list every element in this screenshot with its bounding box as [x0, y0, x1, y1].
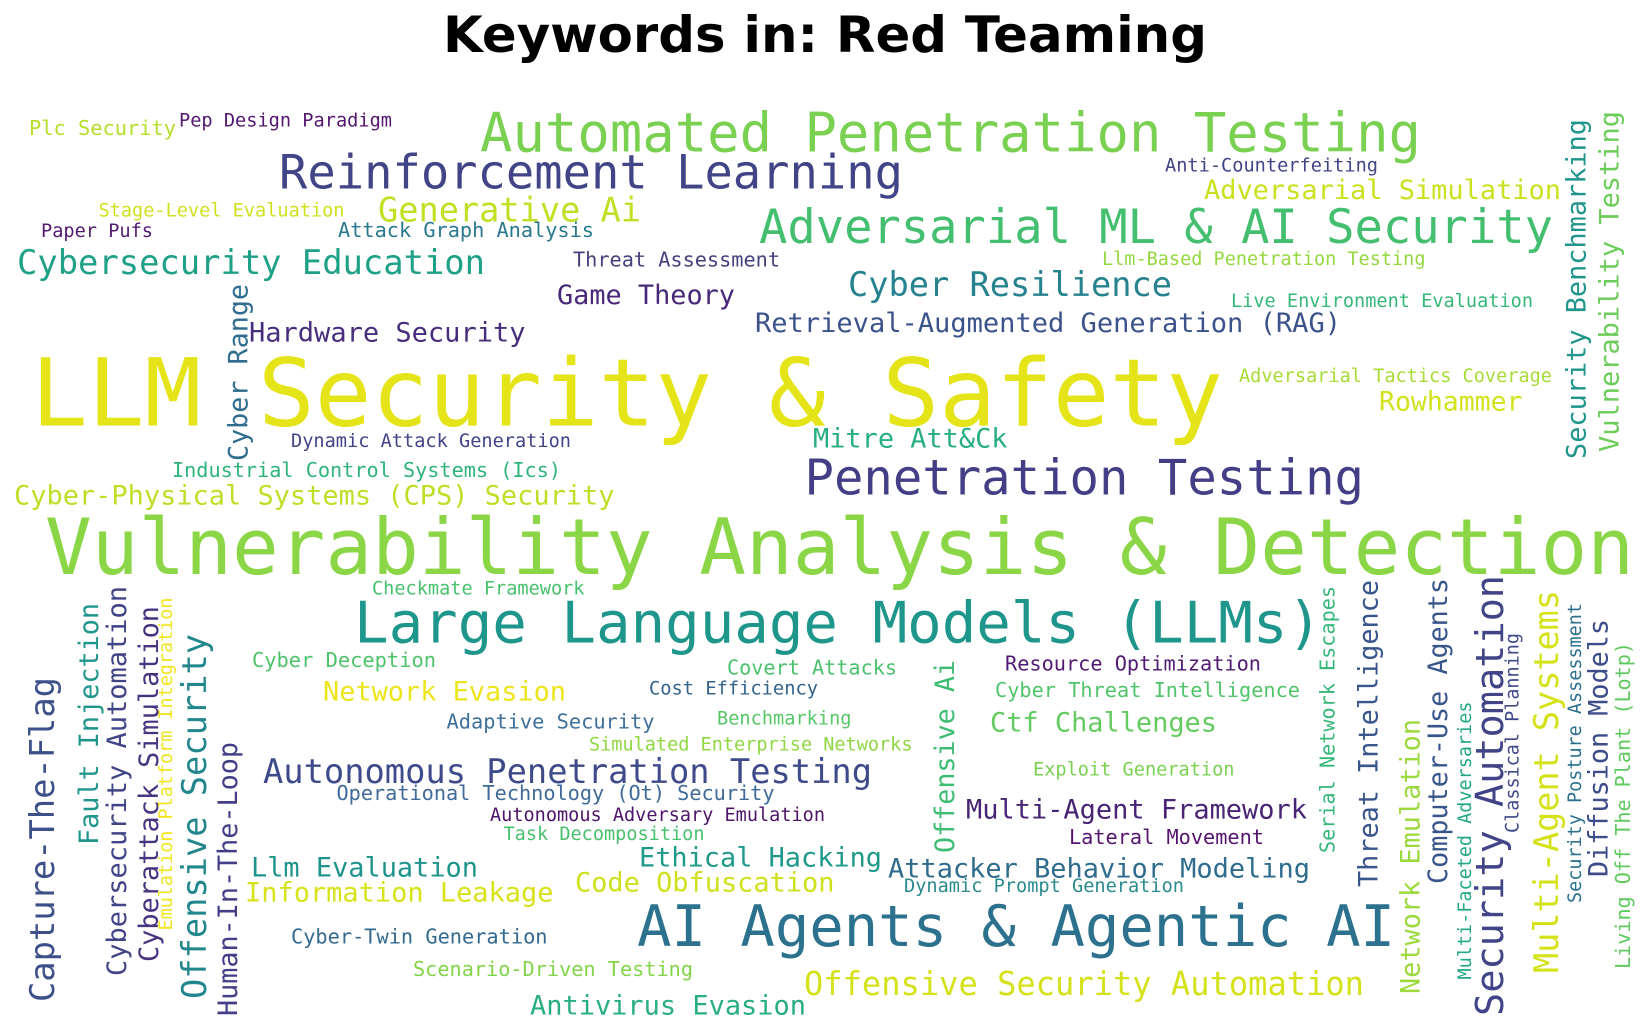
keyword: Cyberattack Simulation: Cyberattack Simulation	[134, 606, 165, 962]
keyword: Cyber Resilience: Cyber Resilience	[848, 265, 1172, 304]
keyword: Threat Intelligence: Threat Intelligence	[1354, 580, 1385, 887]
keyword: Adversarial Tactics Coverage: Adversarial Tactics Coverage	[1239, 366, 1552, 387]
keyword: Generative Ai: Generative Ai	[378, 191, 641, 230]
keyword: Large Language Models (LLMs): Large Language Models (LLMs)	[354, 590, 1322, 656]
keyword: Hardware Security: Hardware Security	[249, 317, 526, 348]
keyword: Living Off The Plant (Lotp): Living Off The Plant (Lotp)	[1611, 642, 1635, 969]
keyword: Cyber-Twin Generation: Cyber-Twin Generation	[291, 925, 548, 949]
keyword: Multi-Agent Systems: Multi-Agent Systems	[1527, 590, 1566, 973]
keyword: Dynamic Prompt Generation: Dynamic Prompt Generation	[904, 876, 1184, 897]
keyword: Industrial Control Systems (Ics): Industrial Control Systems (Ics)	[172, 458, 561, 482]
keyword: Autonomous Penetration Testing: Autonomous Penetration Testing	[263, 752, 872, 791]
keyword: Plc Security: Plc Security	[29, 116, 176, 140]
keyword: Antivirus Evasion: Antivirus Evasion	[530, 991, 806, 1022]
keyword: Operational Technology (Ot) Security: Operational Technology (Ot) Security	[336, 781, 774, 805]
keyword: Cyber Deception: Cyber Deception	[252, 648, 436, 672]
keyword: Ctf Challenges: Ctf Challenges	[990, 708, 1217, 739]
keyword: Security Automation: Security Automation	[1468, 575, 1513, 1016]
keyword: Ethical Hacking: Ethical Hacking	[639, 843, 882, 874]
keyword: Diffusion Models: Diffusion Models	[1584, 619, 1615, 877]
keyword: Threat Assessment: Threat Assessment	[573, 248, 780, 272]
keyword: Game Theory: Game Theory	[557, 280, 735, 311]
keyword: Dynamic Attack Generation: Dynamic Attack Generation	[291, 431, 571, 452]
keyword: Security Posture Assessment: Security Posture Assessment	[1565, 603, 1586, 903]
keyword: Information Leakage: Information Leakage	[245, 878, 554, 909]
keyword: Automated Penetration Testing: Automated Penetration Testing	[480, 102, 1421, 165]
keyword: Multi-Agent Framework: Multi-Agent Framework	[966, 795, 1307, 826]
keyword: Live Environment Evaluation: Live Environment Evaluation	[1231, 291, 1533, 312]
keyword: Mitre Att&Ck: Mitre Att&Ck	[813, 423, 1008, 454]
keyword: Capture-The-Flag: Capture-The-Flag	[23, 677, 62, 1002]
keyword: Offensive Security Automation: Offensive Security Automation	[804, 965, 1364, 1003]
keyword: Cyber-Physical Systems (CPS) Security: Cyber-Physical Systems (CPS) Security	[14, 481, 614, 512]
keyword: Autonomous Adversary Emulation: Autonomous Adversary Emulation	[490, 805, 825, 826]
keyword: Code Obfuscation: Code Obfuscation	[575, 868, 834, 899]
keyword: Task Decomposition: Task Decomposition	[504, 824, 704, 845]
keyword: LLM Security & Safety: LLM Security & Safety	[31, 340, 1223, 449]
keyword: Reinforcement Learning: Reinforcement Learning	[279, 146, 903, 201]
keyword: AI Agents & Agentic AI: AI Agents & Agentic AI	[637, 894, 1395, 960]
keyword: Security Benchmarking: Security Benchmarking	[1562, 119, 1592, 459]
keyword: Covert Attacks: Covert Attacks	[727, 656, 897, 680]
keyword: Lateral Movement: Lateral Movement	[1069, 825, 1264, 849]
keyword: Emulation Platform Integration: Emulation Platform Integration	[156, 598, 177, 930]
keyword: Checkmate Framework: Checkmate Framework	[372, 579, 584, 600]
keyword: Adaptive Security: Adaptive Security	[446, 709, 654, 733]
keyword: Simulated Enterprise Networks: Simulated Enterprise Networks	[589, 735, 912, 756]
keyword: Network Evasion: Network Evasion	[323, 676, 566, 708]
keyword: Llm Evaluation: Llm Evaluation	[251, 852, 478, 883]
keyword: Cyber Threat Intelligence: Cyber Threat Intelligence	[995, 678, 1300, 702]
keyword: Vulnerability Analysis & Detection: Vulnerability Analysis & Detection	[45, 503, 1634, 593]
keyword: Adversarial ML & AI Security: Adversarial ML & AI Security	[759, 200, 1553, 255]
keyword: Classical Planning: Classical Planning	[1503, 633, 1524, 833]
keyword: Offensive Security: Offensive Security	[175, 634, 214, 999]
keyword: Scenario-Driven Testing: Scenario-Driven Testing	[413, 957, 693, 981]
keyword: Vulnerability Testing: Vulnerability Testing	[1595, 111, 1626, 452]
keyword: Anti-Counterfeiting: Anti-Counterfeiting	[1165, 156, 1378, 177]
keyword: Paper Pufs: Paper Pufs	[41, 221, 153, 242]
keyword: Cost Efficiency: Cost Efficiency	[649, 679, 818, 700]
keyword: Offensive Ai: Offensive Ai	[930, 660, 961, 853]
keyword: Retrieval-Augmented Generation (RAG): Retrieval-Augmented Generation (RAG)	[755, 308, 1341, 339]
keyword: Llm-Based Penetration Testing: Llm-Based Penetration Testing	[1102, 249, 1426, 270]
keyword: Resource Optimization: Resource Optimization	[1005, 652, 1261, 676]
keyword: Cybersecurity Education: Cybersecurity Education	[17, 243, 485, 282]
keyword: Rowhammer: Rowhammer	[1379, 387, 1522, 418]
keyword: Multi-Faceted Adversaries: Multi-Faceted Adversaries	[1455, 702, 1476, 980]
keyword: Pep Design Paradigm: Pep Design Paradigm	[179, 111, 392, 132]
keyword: Attacker Behavior Modeling: Attacker Behavior Modeling	[888, 854, 1310, 884]
keyword: Computer-Use Agents: Computer-Use Agents	[1423, 578, 1454, 884]
keyword: Stage-Level Evaluation: Stage-Level Evaluation	[98, 201, 344, 222]
keyword: Penetration Testing: Penetration Testing	[804, 450, 1364, 506]
keyword: Benchmarking: Benchmarking	[717, 709, 852, 730]
title: Keywords in: Red Teaming	[443, 6, 1207, 64]
keyword: Cyber Range: Cyber Range	[223, 284, 254, 461]
keyword: Fault Injection: Fault Injection	[74, 603, 105, 845]
keyword: Network Emulation: Network Emulation	[1396, 719, 1427, 994]
keyword: Serial Network Escapes: Serial Network Escapes	[1316, 586, 1340, 853]
keyword: Exploit Generation: Exploit Generation	[1033, 760, 1234, 781]
keyword: Human-In-The-Loop: Human-In-The-Loop	[213, 742, 244, 1016]
keyword: Attack Graph Analysis: Attack Graph Analysis	[338, 218, 594, 242]
keyword: Cybersecurity Automation: Cybersecurity Automation	[102, 586, 133, 976]
keyword: Adversarial Simulation: Adversarial Simulation	[1204, 175, 1561, 206]
